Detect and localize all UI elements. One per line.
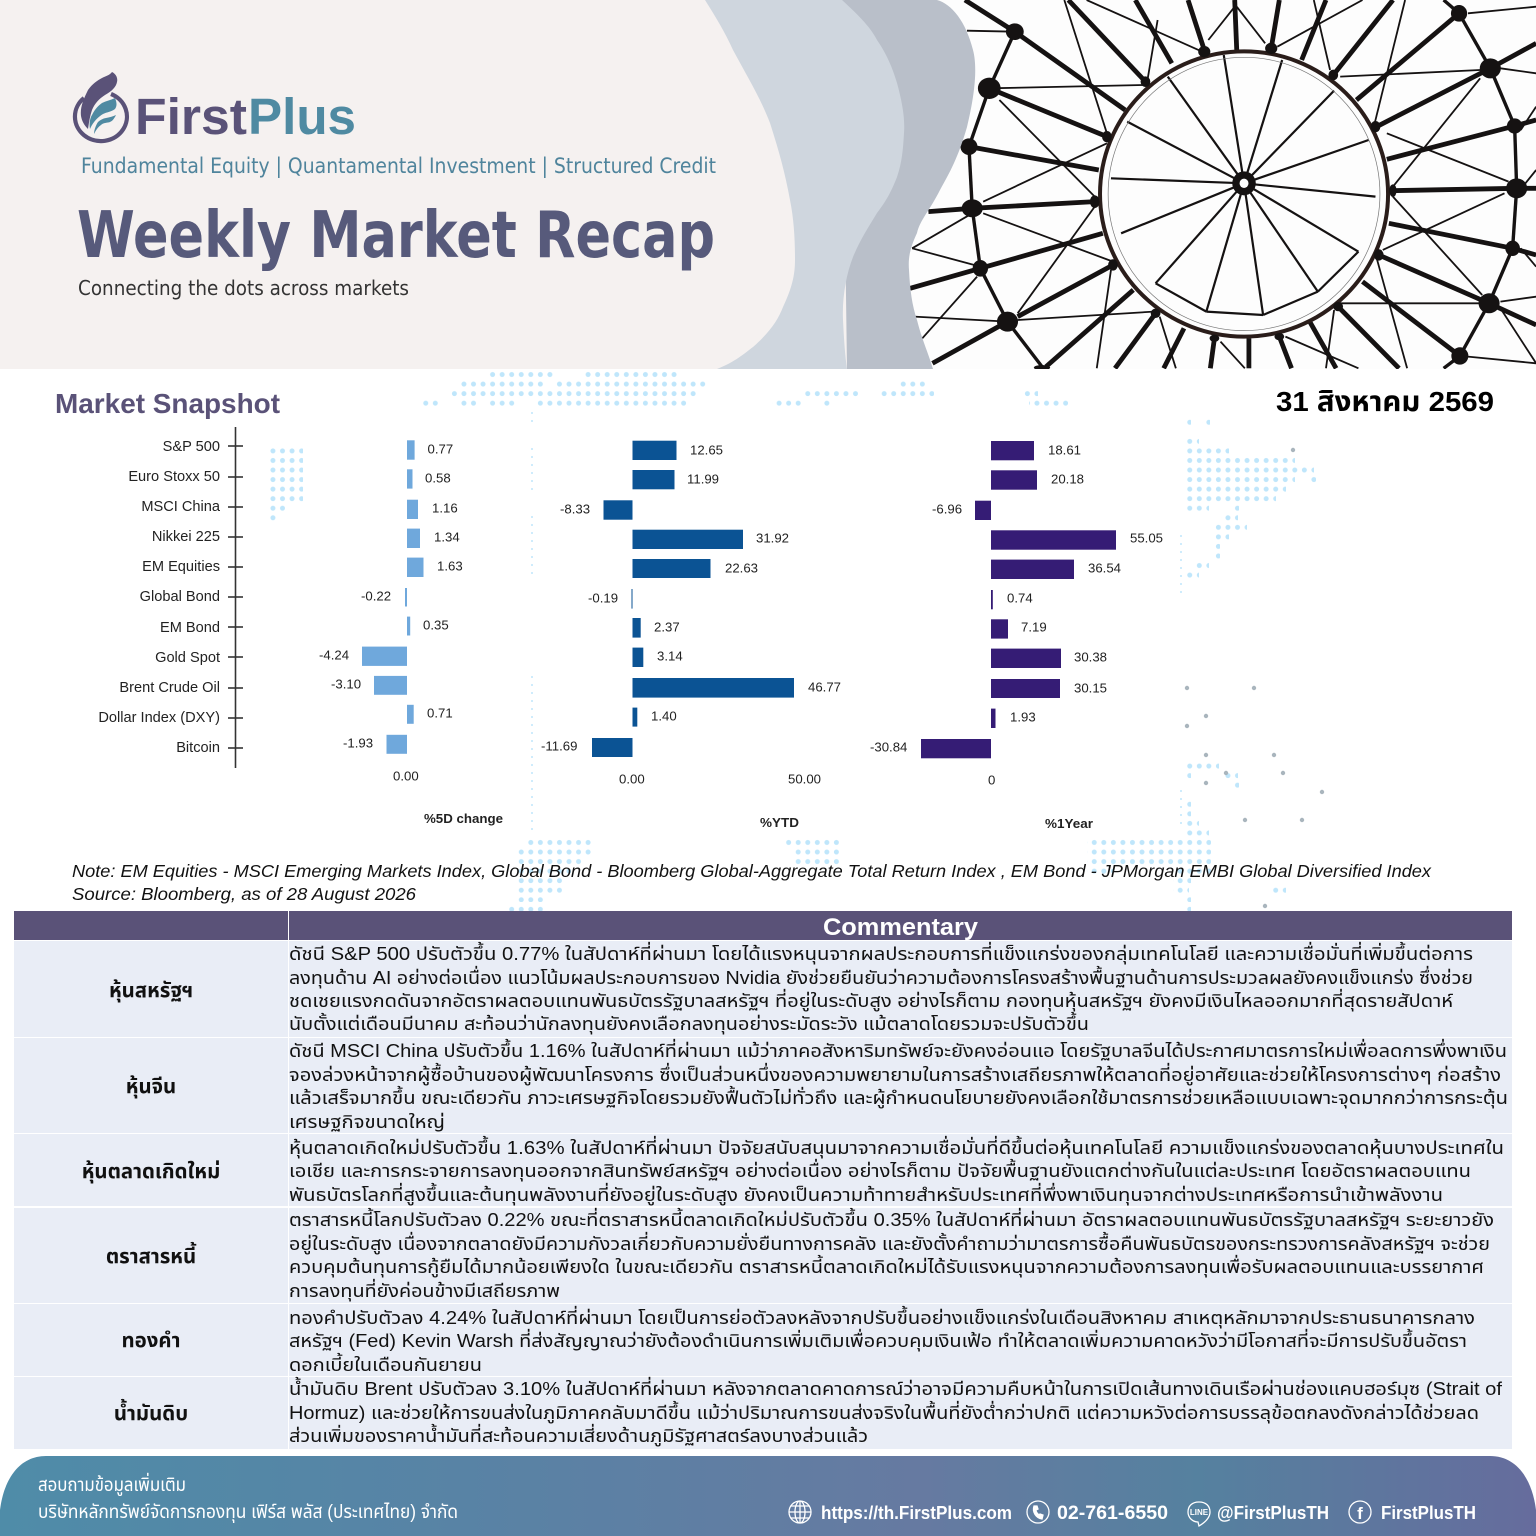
panel: %YTD: -0.19 [588,590,618,606]
panel: %1Year: 55.05 [1130,530,1163,546]
row: US equities: หุ้นสหรัฐฯ [109,979,193,1003]
panel: %1Year: 30.38 [1074,650,1107,664]
table header [14,911,1512,941]
row: China equities: แล้วเสร็จมากขึ้น ขณะเดียวกัน ภาวะเศรษฐกิจโดยรวมยังฟื้นตัวไม่ทั่วถึง และผู้กำหนดนโยบายยังคงเลือกใช้มาตรการช่วยเหลือแบบเฉพาะจุดมากกว่าการกระตุ้น [289,1085,1508,1110]
company text [38,1472,458,1523]
dark curve [842,0,975,369]
logo: FirstPlus [75,72,356,145]
table header: Commentary [823,914,979,941]
row: gold: ทองคำปรับตัวลง 4.24% ในสัปดาห์ที่ผ่านมา โดยเป็นการย่อตัวลงหลังจากปรับขึ้นอย่างแข็งแกร่งในเดือนสิงหาคม สาเหตุหลักมาจากประธานธนาคารกลาง [289,1305,1475,1329]
category axis: EM Bond [160,620,220,636]
row: crude oil: น้ำมันดิบ Brent ปรับตัวลง 3.10% ในสัปดาห์ที่ผ่านมา หลังจากตลาดคาดการณ์ว่าอาจมีความคืบหน้าในการเปิดเส้นทางเดินเรือผ่านช่องแคบฮอร์มุซ (Strait of [289,1376,1503,1400]
category axis: MSCI China [141,499,221,515]
panel: %YTD: 12.65 [690,442,723,458]
row: China equities [14,1038,1512,1133]
row: bonds: ตราสารหนี้โลกปรับตัวลง 0.22% ขณะที่ตราสารหนี้ตลาดเกิดใหม่ปรับตัวขึ้น 0.35% ในสัปดาห์ที่ผ่านมา อัตราผลตอบแทนพันธบัตรรัฐบาลสหรัฐฯ ระยะยาวยัง [289,1207,1494,1230]
row: emerging market equities: หุ้นตลาดเกิดใหม่ [82,1160,220,1184]
spokes [1111,55,1375,315]
category axis: Dollar Index (DXY) [98,710,220,726]
panel: %YTD: 2.37 [654,620,680,634]
row: crude oil: Hormuz) และช่วยให้การขนส่งในภูมิภาคกลับมาดีขึ้น แม้ว่าปริมาณการขนส่งจริงในพื้นที่ยังต่ำกว่าปกติ แต่ความหวังต่อการบรรลุข้อตกลงดังกล่าวได้ช่วยลด [289,1400,1479,1425]
note and source: Note: EM Equities - MSCI Emerging Markets Index, Global Bond - Bloomberg Global-Aggregate Total Return Index , EM Bond - JPMorgan EMBI Global Diversified Index [72,861,1432,881]
row: crude oil: ส่วนเพิ่มของราคาน้ำมันที่สะท้อนความเสี่ยงด้านภูมิรัฐศาสตร์ลงบางส่วนแล้ว [289,1423,868,1448]
panel: %5D change: 0.00 [393,768,419,784]
bar chart: market performance [98,427,1163,831]
row: bonds: การลงทุนที่ยังค่อนข้างมีเสถียรภาพ [289,1278,560,1302]
background dot map [269,370,1316,911]
row: crude oil: น้ำมันดิบ [114,1398,188,1425]
row: bonds [14,1207,1512,1303]
axis title: %1Year: %1Year [1045,816,1093,831]
panel: %YTD: 3.14 [657,648,683,664]
company text: บริษัทหลักทรัพย์จัดการกองทุน เฟิร์ส พลัส (ประเทศไทย) จำกัด [38,1502,458,1523]
subtitle: Connecting the dots across markets [78,276,409,300]
panel: %YTD: 1.40 [651,708,677,724]
panel: %1Year: -30.84 [870,740,907,754]
icon: LINE [1188,1502,1210,1526]
panel: %YTD: -8.33 [560,502,590,516]
panel: %5D change: 0.77 [428,442,453,456]
photo: geodesic dome skylight [900,0,1536,370]
panel: %5D change: 1.63 [437,558,463,574]
axis title: %5D change: %5D change [424,811,503,826]
row: US equities: ชดเชยแรงกดดันจากอัตราผลตอบแทนพันธบัตรรัฐบาลสหรัฐฯ ที่อยู่ในระดับสูง อย่างไรก็ตาม กองทุนหุ้นสหรัฐฯ ยังคงมีเงินไหลออกมากที่สุดรายสัปดาห์ [289,988,1453,1013]
logo: FirstPlus: Plus [248,88,356,145]
category axis: Euro Stoxx 50 [128,469,220,485]
wordmark: First [135,88,247,145]
icon: Facebook: f [1357,1504,1363,1523]
panel: %5D change: 0.58 [425,470,451,486]
panel: %1Year: -6.96 [932,502,962,516]
category axis: Bitcoin [176,740,220,756]
category axis: Nikkei 225 [152,529,220,545]
category axis: EM Equities [142,559,220,575]
row: gold: ดอกเบี้ยในเดือนกันยายน [289,1352,482,1375]
panel: %1Year: 0.74 [1007,590,1033,606]
row: gold: ทองคำ [122,1329,180,1352]
row: bonds: ควบคุมต้นทุนการกู้ยืมได้มากน้อยเพียงใด ในขณะเดียวกัน ตราสารหนี้ตลาดเกิดใหม่ได้รับแรงหนุนจากความต้องการลงทุนเพื่อรับผลตอบแทนและบรรยากาศ [289,1254,1484,1279]
category axis [98,427,243,768]
category axis: Brent Crude Oil [119,680,220,696]
category axis: S&P 500 [163,439,220,455]
panel: %1Year [870,441,1163,831]
panel: %5D change: -0.22 [361,588,391,604]
date: 31 สิงหาคม 2569 [1276,386,1494,417]
tagline: Fundamental Equity | Quantamental Investment | Structured Credit [81,154,716,179]
icon: LINE: LINE [1190,1508,1209,1517]
commentary table [14,911,1512,1449]
row: gold: สหรัฐฯ (Fed) Kevin Warsh ที่ส่งสัญญาณว่ายังต้องดำเนินการเพิ่มเติมเพื่อควบคุมเงินเฟ้อ ทำให้ตลาดเพิ่มความคาดหวังว่ามีโอกาสที่จะมีการปรับขึ้นอัตรา [289,1328,1467,1352]
row: China equities: ดัชนี MSCI China ปรับตัวขึ้น 1.16% ในสัปดาห์ที่ผ่านมา แม้ว่าภาคอสังหาริมทรัพย์จะยังคงอ่อนแอ โดยรัฐบาลจีนได้ประกาศมาตรการใหม่เพื่อลดการพึ่งพาเงิน [289,1038,1507,1061]
icon: phone [1027,1501,1049,1523]
category axis: Global Bond [140,589,220,605]
phone number: 02-761-6550 [1057,1503,1168,1524]
website: https://th.FirstPlus.com [821,1502,1012,1523]
panel: %5D change: -4.24 [319,648,349,662]
panel: %5D change: 0.35 [423,618,449,632]
row: emerging market equities: หุ้นตลาดเกิดใหม่ปรับตัวขึ้น 1.63% ในสัปดาห์ที่ผ่านมา ปัจจัยสนับสนุนมาจากความเชื่อมั่นที่ดีขึ้นต่อหุ้นเทคโนโลยี ความแข็งแกร่งของตลาดหุ้นบางประเทศใน [289,1135,1504,1159]
panel: %5D change [319,440,503,826]
LINE handle: @FirstPlusTH [1217,1502,1329,1523]
panel: %YTD: 46.77 [808,680,841,694]
panel: %1Year: 18.61 [1048,442,1081,458]
header banner [0,0,1536,370]
panel: %5D change: 1.34 [434,530,460,544]
row: China equities: เศรษฐกิจขนาดใหญ่ [289,1112,445,1132]
light curve [705,0,904,369]
panel: %YTD: 0.00 [619,772,645,786]
Facebook handle: FirstPlusTH [1381,1502,1476,1523]
row: emerging market equities: เอเชีย และการกระจายการลงทุนออกจากสินทรัพย์สหรัฐฯ อย่างต่อเนื่อง อย่างไรก็ตาม ปัจจัยพื้นฐานยังแตกต่างกันในแต่ละประเทศ โดยอัตราผลตอบแทน [289,1158,1471,1182]
row: crude oil [14,1376,1512,1449]
faint dashed meridians [532,412,1181,830]
note and source: Source: Bloomberg, as of 28 August 2026 [72,884,416,904]
icon: feather ring [75,72,127,141]
panel: %YTD [541,441,841,830]
panel: %1Year: 20.18 [1051,472,1084,486]
row: bonds: อยู่ในระดับสูง เนื่องจากตลาดยังมีความกังวลเกี่ยวกับความยั่งยืนทางการคลัง และยังตั้งคำถามว่ามาตรการซื้อคืนพันธบัตรของกระทรวงการคลังสหรัฐฯ จะช่วย [289,1231,1490,1256]
panel: %YTD: 31.92 [756,530,789,546]
section heading: Market Snapshot: Market Snapshot [55,388,280,419]
axis title: %YTD: %YTD [760,815,799,830]
panel: %5D change: -3.10 [331,676,361,692]
row: China equities: หุ้นจีน [126,1075,176,1099]
row: US equities [14,941,1512,1037]
row: gold [14,1304,1512,1376]
title: Weekly Market Recap [77,199,715,273]
icon: globe [789,1501,811,1523]
panel: %1Year: 30.15 [1074,680,1107,696]
footer [0,1456,1536,1536]
category axis: Gold Spot [155,650,220,666]
row: US equities: ดัชนี S&P 500 ปรับตัวขึ้น 0.77% ในสัปดาห์ที่ผ่านมา โดยได้แรงหนุนจากผลประกอบการที่แข็งแกร่งของกลุ่มเทคโนโลยี และความเชื่อมั่นที่เพิ่มขึ้นต่อการ [289,941,1473,965]
row: emerging market equities [14,1134,1512,1207]
panel: %1Year: 0 [988,772,995,788]
icon: Facebook [1349,1501,1371,1523]
panel: %5D change: 1.16 [432,500,458,516]
panel: %YTD: -11.69 [541,738,577,754]
panel: %YTD: 22.63 [725,560,758,576]
company text: สอบถามข้อมูลเพิ่มเติม [38,1472,186,1497]
gray map dots [1185,448,1324,908]
note and source [72,861,1432,904]
panel: %5D change: -1.93 [343,736,373,750]
row: emerging market equities: พันธบัตรโลกที่สูงขึ้นและต้นทุนพลังงานที่ยังอยู่ในระดับสูง ยังคงเป็นความท้าทายสำหรับประเทศที่พึ่งพาเงินทุนจากต่างประเทศหรือการนำเข้าพลังงาน [289,1182,1443,1207]
panel: %YTD: 50.00 [788,772,821,786]
panel: %5D change: 0.71 [427,706,453,720]
row: US equities: ลงทุนด้าน AI อย่างต่อเนื่อง แนวโน้มผลประกอบการของ Nvidia ยังช่วยยืนยันว่าความต้องการโครงสร้างพื้นฐานด้านการประมวลผลยังคงแข็งแกร่ง ซึ่งช่วย [289,965,1473,989]
row: bonds: ตราสารหนี้ [106,1241,197,1268]
panel: %1Year: 7.19 [1021,620,1047,634]
row: US equities: นับตั้งแต่เดือนมีนาคม สะท้อนว่านักลงทุนยังคงเลือกลงทุนอย่างระมัดระวัง แม้ตลาดโดยรวมจะปรับตัวขึ้น [289,1011,1089,1035]
panel: %1Year: 36.54 [1088,560,1121,576]
row: China equities: จองล่วงหน้าจากผู้ซื้อบ้านของผู้พัฒนาโครงการ ซึ่งเป็นส่วนหนึ่งของความพยายามในการสร้างเสถียรภาพให้ตลาดที่อยู่อาศัยและช่วยให้โครงการต่างๆ ก่อสร้าง [289,1062,1501,1087]
panel: %YTD: 11.99 [687,472,719,486]
panel: %1Year: 1.93 [1010,710,1036,724]
